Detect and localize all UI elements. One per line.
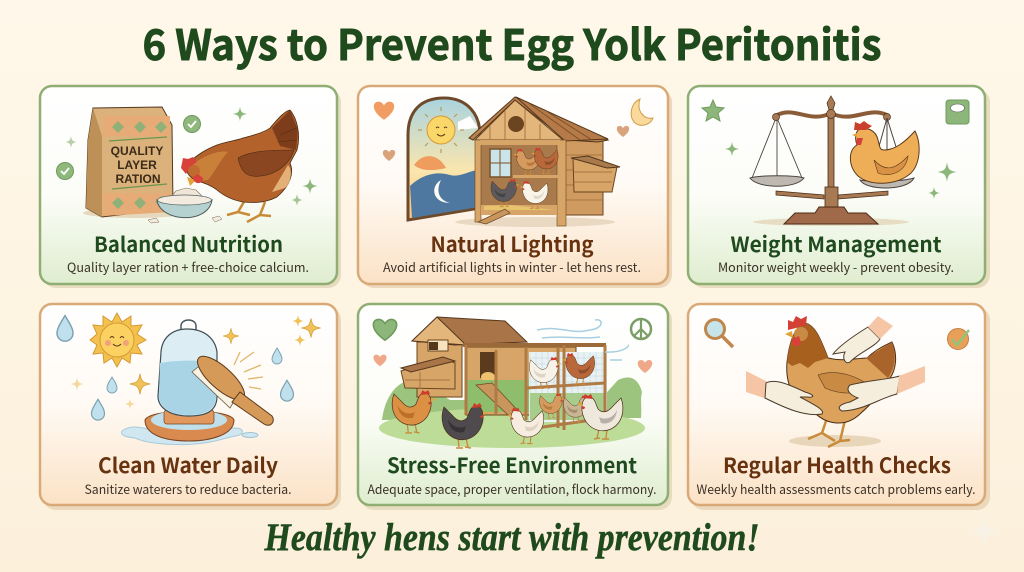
description: Quality layer ration + free-choice calcium. (67, 257, 309, 276)
icon: wooden coop (455, 97, 620, 227)
panel: regular health checks (688, 304, 990, 510)
panel: stress-free environment (358, 304, 672, 510)
panel: weight management (688, 86, 990, 288)
icon: water drops (57, 316, 294, 420)
heading: Balanced Nutrition (94, 229, 283, 259)
icon: foreground hens (392, 390, 623, 448)
icon: scale badge (946, 100, 969, 124)
icon: garden and bushes (379, 377, 645, 448)
heading: Clean Water Daily (98, 450, 278, 480)
icon: feed bag: QUALITY (111, 144, 163, 158)
icon: star (702, 100, 724, 121)
panel: balanced nutrition (40, 86, 341, 288)
icon: hearts and moon (374, 99, 653, 161)
icon: corner sparkle (968, 515, 1000, 547)
heading: Regular Health Checks (723, 450, 951, 480)
description: Adequate space, proper ventilation, flock harmony. (368, 479, 656, 498)
panel: clean water daily (40, 304, 341, 510)
icon: waterer with brush (122, 320, 273, 445)
title: 6 Ways to Prevent Egg Yolk Peritonitis (142, 12, 882, 73)
description: Sanitize waterers to reduce bacteria. (84, 479, 292, 498)
icon: check badge (948, 328, 969, 350)
icon: smiling sun (90, 313, 146, 367)
icon: sparkles (725, 142, 957, 199)
footer tagline: Healthy hens start with prevention! (264, 516, 760, 559)
icon: balance scale with hen (750, 96, 919, 226)
icon: feed bag (83, 107, 187, 218)
icon: feed bag: RATION (115, 172, 161, 186)
icon: feed bag: LAYER (117, 158, 157, 172)
icon: gold sparkles (70, 315, 321, 409)
description: Weekly health assessments catch problems early. (696, 479, 976, 498)
icon: magnifying glass (706, 320, 733, 347)
heading: Natural Lighting (430, 229, 594, 259)
description: Avoid artificial lights in winter - let hens rest. (383, 257, 641, 276)
icon: hearts and peace sign (373, 319, 652, 373)
icon: wind lines (537, 320, 628, 360)
icon: check badges and sparkles (56, 107, 318, 206)
heading: Stress-Free Environment (387, 450, 637, 480)
icon: day and night window (408, 98, 480, 220)
panel: natural lighting (358, 86, 672, 288)
icon: hen with gloved hands (746, 316, 925, 447)
description: Monitor weight weekly - prevent obesity. (718, 257, 954, 276)
heading: Weight Management (730, 229, 942, 259)
icon: brown hen pecking (181, 110, 299, 222)
icon: coop and run (401, 317, 607, 430)
icon: feed bowl (148, 188, 222, 223)
